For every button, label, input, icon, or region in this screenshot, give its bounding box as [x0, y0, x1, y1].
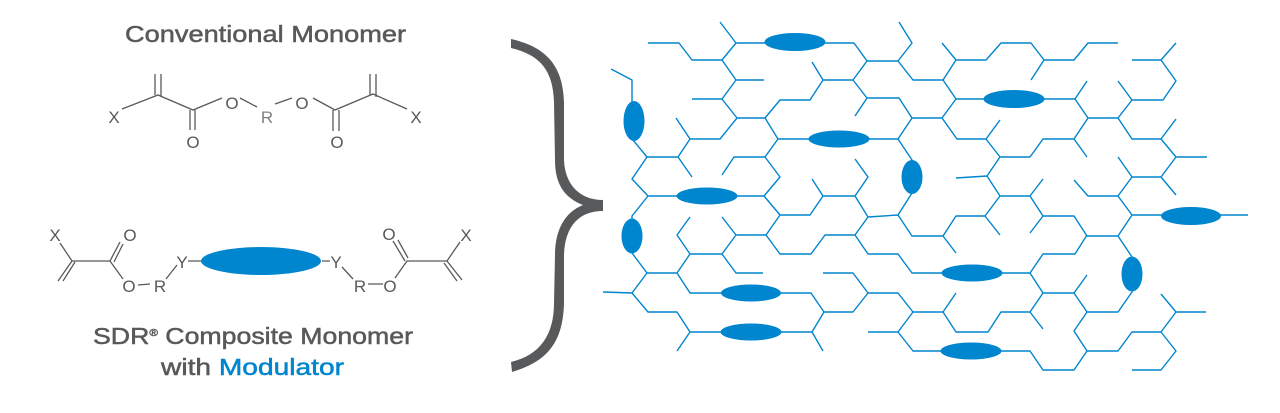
- chemical structure: SDR composite monomer: Y: [176, 253, 188, 272]
- chemical structure: conventional monomer: O: [330, 133, 344, 152]
- heading: SDR Composite Monomer: ®: [149, 328, 159, 339]
- heading: SDR Composite Monomer: Composite Monomer: [158, 323, 413, 349]
- chemical structure: SDR composite monomer: [49, 225, 472, 296]
- chemical structure: SDR composite monomer: X: [49, 226, 61, 245]
- chemical structure: conventional monomer: X: [108, 108, 120, 127]
- chemical structure: SDR composite monomer: O: [383, 277, 397, 296]
- chemical structure: conventional monomer: R: [261, 108, 273, 127]
- chemical structure: SDR composite monomer: O: [122, 277, 136, 296]
- polymer network: [603, 22, 1248, 370]
- chemical structure: conventional monomer: O: [225, 94, 239, 113]
- chemical structure: SDR composite monomer: O: [123, 226, 137, 245]
- chemical structure: SDR composite monomer: Y: [330, 253, 342, 272]
- chemical structure: SDR composite monomer: R: [354, 277, 366, 296]
- modulator ellipses: [622, 33, 1221, 360]
- chemical structure: conventional monomer: X: [410, 108, 422, 127]
- curly brace: [511, 39, 603, 372]
- heading: with Modulator: with Modulator: [160, 354, 344, 380]
- heading: Conventional Monomer: Conventional Monomer: [125, 21, 406, 47]
- chemical structure: conventional monomer: O: [186, 133, 200, 152]
- chemical structure: SDR composite monomer: X: [460, 226, 472, 245]
- heading: SDR Composite Monomer: SDR: [93, 323, 142, 349]
- chemical structure: conventional monomer: [108, 74, 422, 152]
- network chains: [603, 22, 1248, 370]
- chemical structure: SDR composite monomer: R: [154, 277, 166, 296]
- icon: modulator ellipse: [201, 247, 321, 275]
- chemical structure: conventional monomer: O: [295, 94, 309, 113]
- chemical structure: SDR composite monomer: O: [382, 225, 396, 244]
